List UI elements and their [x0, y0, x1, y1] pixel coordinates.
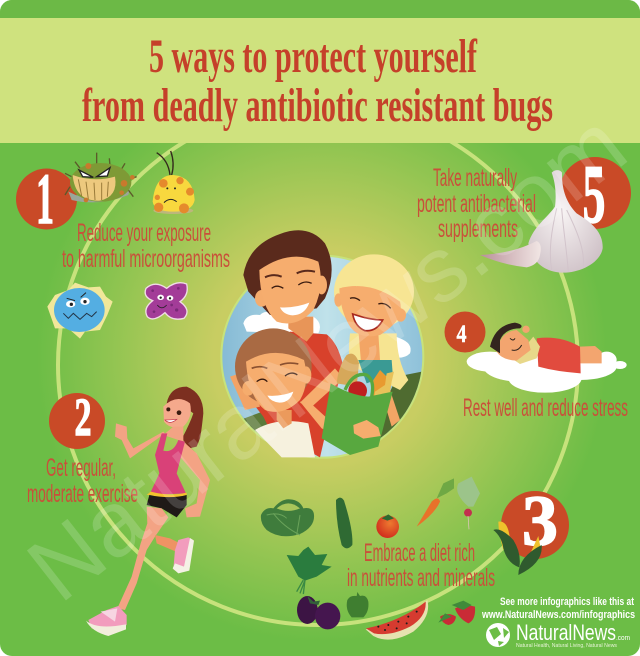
text: step 3: in nutrients and minerals	[347, 564, 495, 592]
icon: blue germ	[47, 283, 113, 339]
icon: watermelon	[366, 600, 428, 640]
number badge 2: 2	[74, 387, 92, 447]
woman	[300, 254, 414, 431]
title band	[0, 18, 640, 143]
icon: cabbage	[261, 499, 314, 536]
text: step 1: Reduce your exposure	[77, 219, 211, 247]
text: step 5: Take naturally	[433, 164, 517, 192]
number badge 1	[16, 159, 77, 239]
sky scene	[222, 257, 422, 457]
number badge 5: 5	[582, 148, 606, 241]
number badge 4	[444, 312, 486, 352]
icon: yellow germ	[153, 151, 195, 214]
icon: green germ	[65, 153, 137, 202]
panel: step 3 diet	[261, 477, 569, 640]
text: step 5	[417, 164, 536, 243]
icon: corn	[493, 522, 542, 575]
text: step 3	[347, 539, 495, 592]
icon: zucchini	[336, 498, 352, 548]
number badge 3: 3	[522, 481, 558, 561]
number badge 5	[559, 148, 631, 241]
boy	[235, 328, 315, 457]
text: step 2: moderate exercise	[27, 480, 138, 508]
logo: Natural News: NaturalNews	[516, 620, 616, 645]
logo: Natural News: .com	[616, 635, 630, 642]
text: step 1	[62, 219, 230, 273]
text: step 3: Embrace a diet rich	[364, 539, 475, 567]
panel: step 5 supplements	[417, 148, 631, 273]
icon: eggplants	[297, 596, 340, 629]
man	[230, 230, 343, 457]
icon: green pepper	[347, 592, 368, 617]
text: step 2	[27, 454, 138, 508]
icon: radish	[457, 477, 480, 529]
text: step 1: to harmful microorganisms	[62, 245, 230, 273]
icon: globe	[486, 623, 510, 647]
text: step 2: Get regular,	[46, 454, 116, 482]
number badge 3	[501, 481, 569, 561]
watermark: NaturalNews.com	[10, 93, 640, 621]
shopping bag	[322, 354, 394, 455]
number badge 1: 1	[36, 159, 54, 239]
spiral ring	[58, 105, 578, 625]
logo: Natural News	[486, 620, 630, 649]
icon: purple germ	[145, 283, 187, 319]
number badge 2	[49, 387, 105, 449]
text: step 5: potent antibacterial	[417, 190, 536, 218]
text: step 5: supplements	[438, 215, 518, 243]
icon: tomato	[376, 514, 399, 538]
panel: step 2 exercise	[27, 387, 210, 636]
ring	[220, 255, 424, 459]
icon: carrot	[417, 478, 454, 527]
logo: Natural News: Natural Health, Natural Living, Natural News	[516, 643, 617, 649]
title	[82, 30, 553, 132]
number badge 4: 4	[456, 321, 467, 348]
icons: microbes	[47, 151, 195, 339]
icon: spinach	[287, 547, 332, 594]
panel: step 4 rest	[444, 312, 628, 422]
icon: runner	[86, 387, 210, 636]
icon: sleeper on cloud	[467, 323, 627, 393]
footer: more infographics	[481, 596, 635, 621]
icon: garlic	[480, 170, 603, 273]
icons: vegetables	[261, 477, 542, 640]
panel: central family illustration	[220, 230, 424, 458]
icon: strawberries	[438, 601, 475, 625]
panel: step 1 microorganisms	[16, 151, 230, 339]
